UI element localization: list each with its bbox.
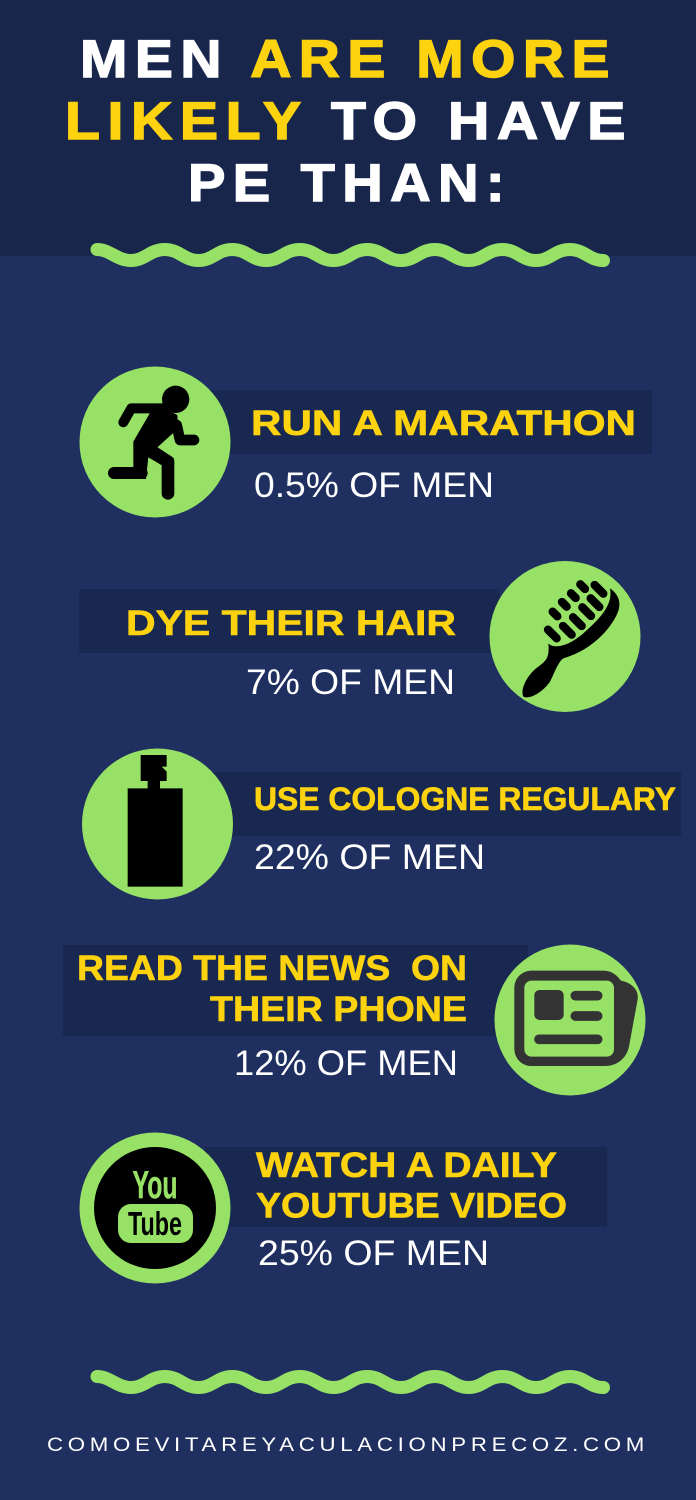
heading: WATCH A DAILY <box>256 1146 557 1185</box>
heading: THEIR PHONE <box>210 990 467 1029</box>
title: LIKELY TO HAVE <box>65 92 633 151</box>
item: run a marathon <box>80 366 652 518</box>
icon: cologne bottle <box>82 748 233 900</box>
heading: YOUTUBE VIDEO <box>256 1186 567 1226</box>
statistic: 0.5% OF MEN <box>254 466 494 505</box>
label bar <box>79 589 500 653</box>
item: read the news <box>63 944 646 1096</box>
item: dye their hair <box>79 561 640 712</box>
icon: hair brush <box>490 561 640 712</box>
heading <box>256 1146 567 1226</box>
top wavy divider <box>97 250 604 260</box>
header band <box>0 0 696 256</box>
title <box>65 30 633 213</box>
statistic: 22% OF MEN <box>254 838 485 877</box>
icon: newspaper <box>494 944 646 1096</box>
label bar <box>63 945 528 1036</box>
label bar <box>205 1147 607 1227</box>
icon: youtube: You <box>132 1164 178 1207</box>
heading: USE COLOGNE REGULARY <box>254 781 676 817</box>
statistic: 7% OF MEN <box>246 663 455 702</box>
statistic: 25% OF MEN <box>258 1234 489 1273</box>
icon: runner <box>80 366 230 518</box>
icon: youtube: Tube <box>128 1205 182 1242</box>
heading: READ THE NEWS ON <box>77 949 467 988</box>
item: youtube video <box>80 1132 607 1284</box>
label bar <box>205 390 652 454</box>
title: MEN ARE MORE <box>80 30 617 89</box>
label bar <box>210 772 681 836</box>
bottom wavy divider <box>97 1376 604 1388</box>
heading: DYE THEIR HAIR <box>126 604 456 643</box>
icon: youtube <box>80 1132 230 1284</box>
statistic: 12% OF MEN <box>234 1044 458 1083</box>
item: use cologne <box>82 748 681 900</box>
title: PE THAN: <box>188 154 512 213</box>
heading: RUN A MARATHON <box>251 404 636 443</box>
heading <box>77 949 467 1029</box>
footer url: COMOEVITAREYACULACIONPRECOZ.COM <box>47 1435 649 1456</box>
